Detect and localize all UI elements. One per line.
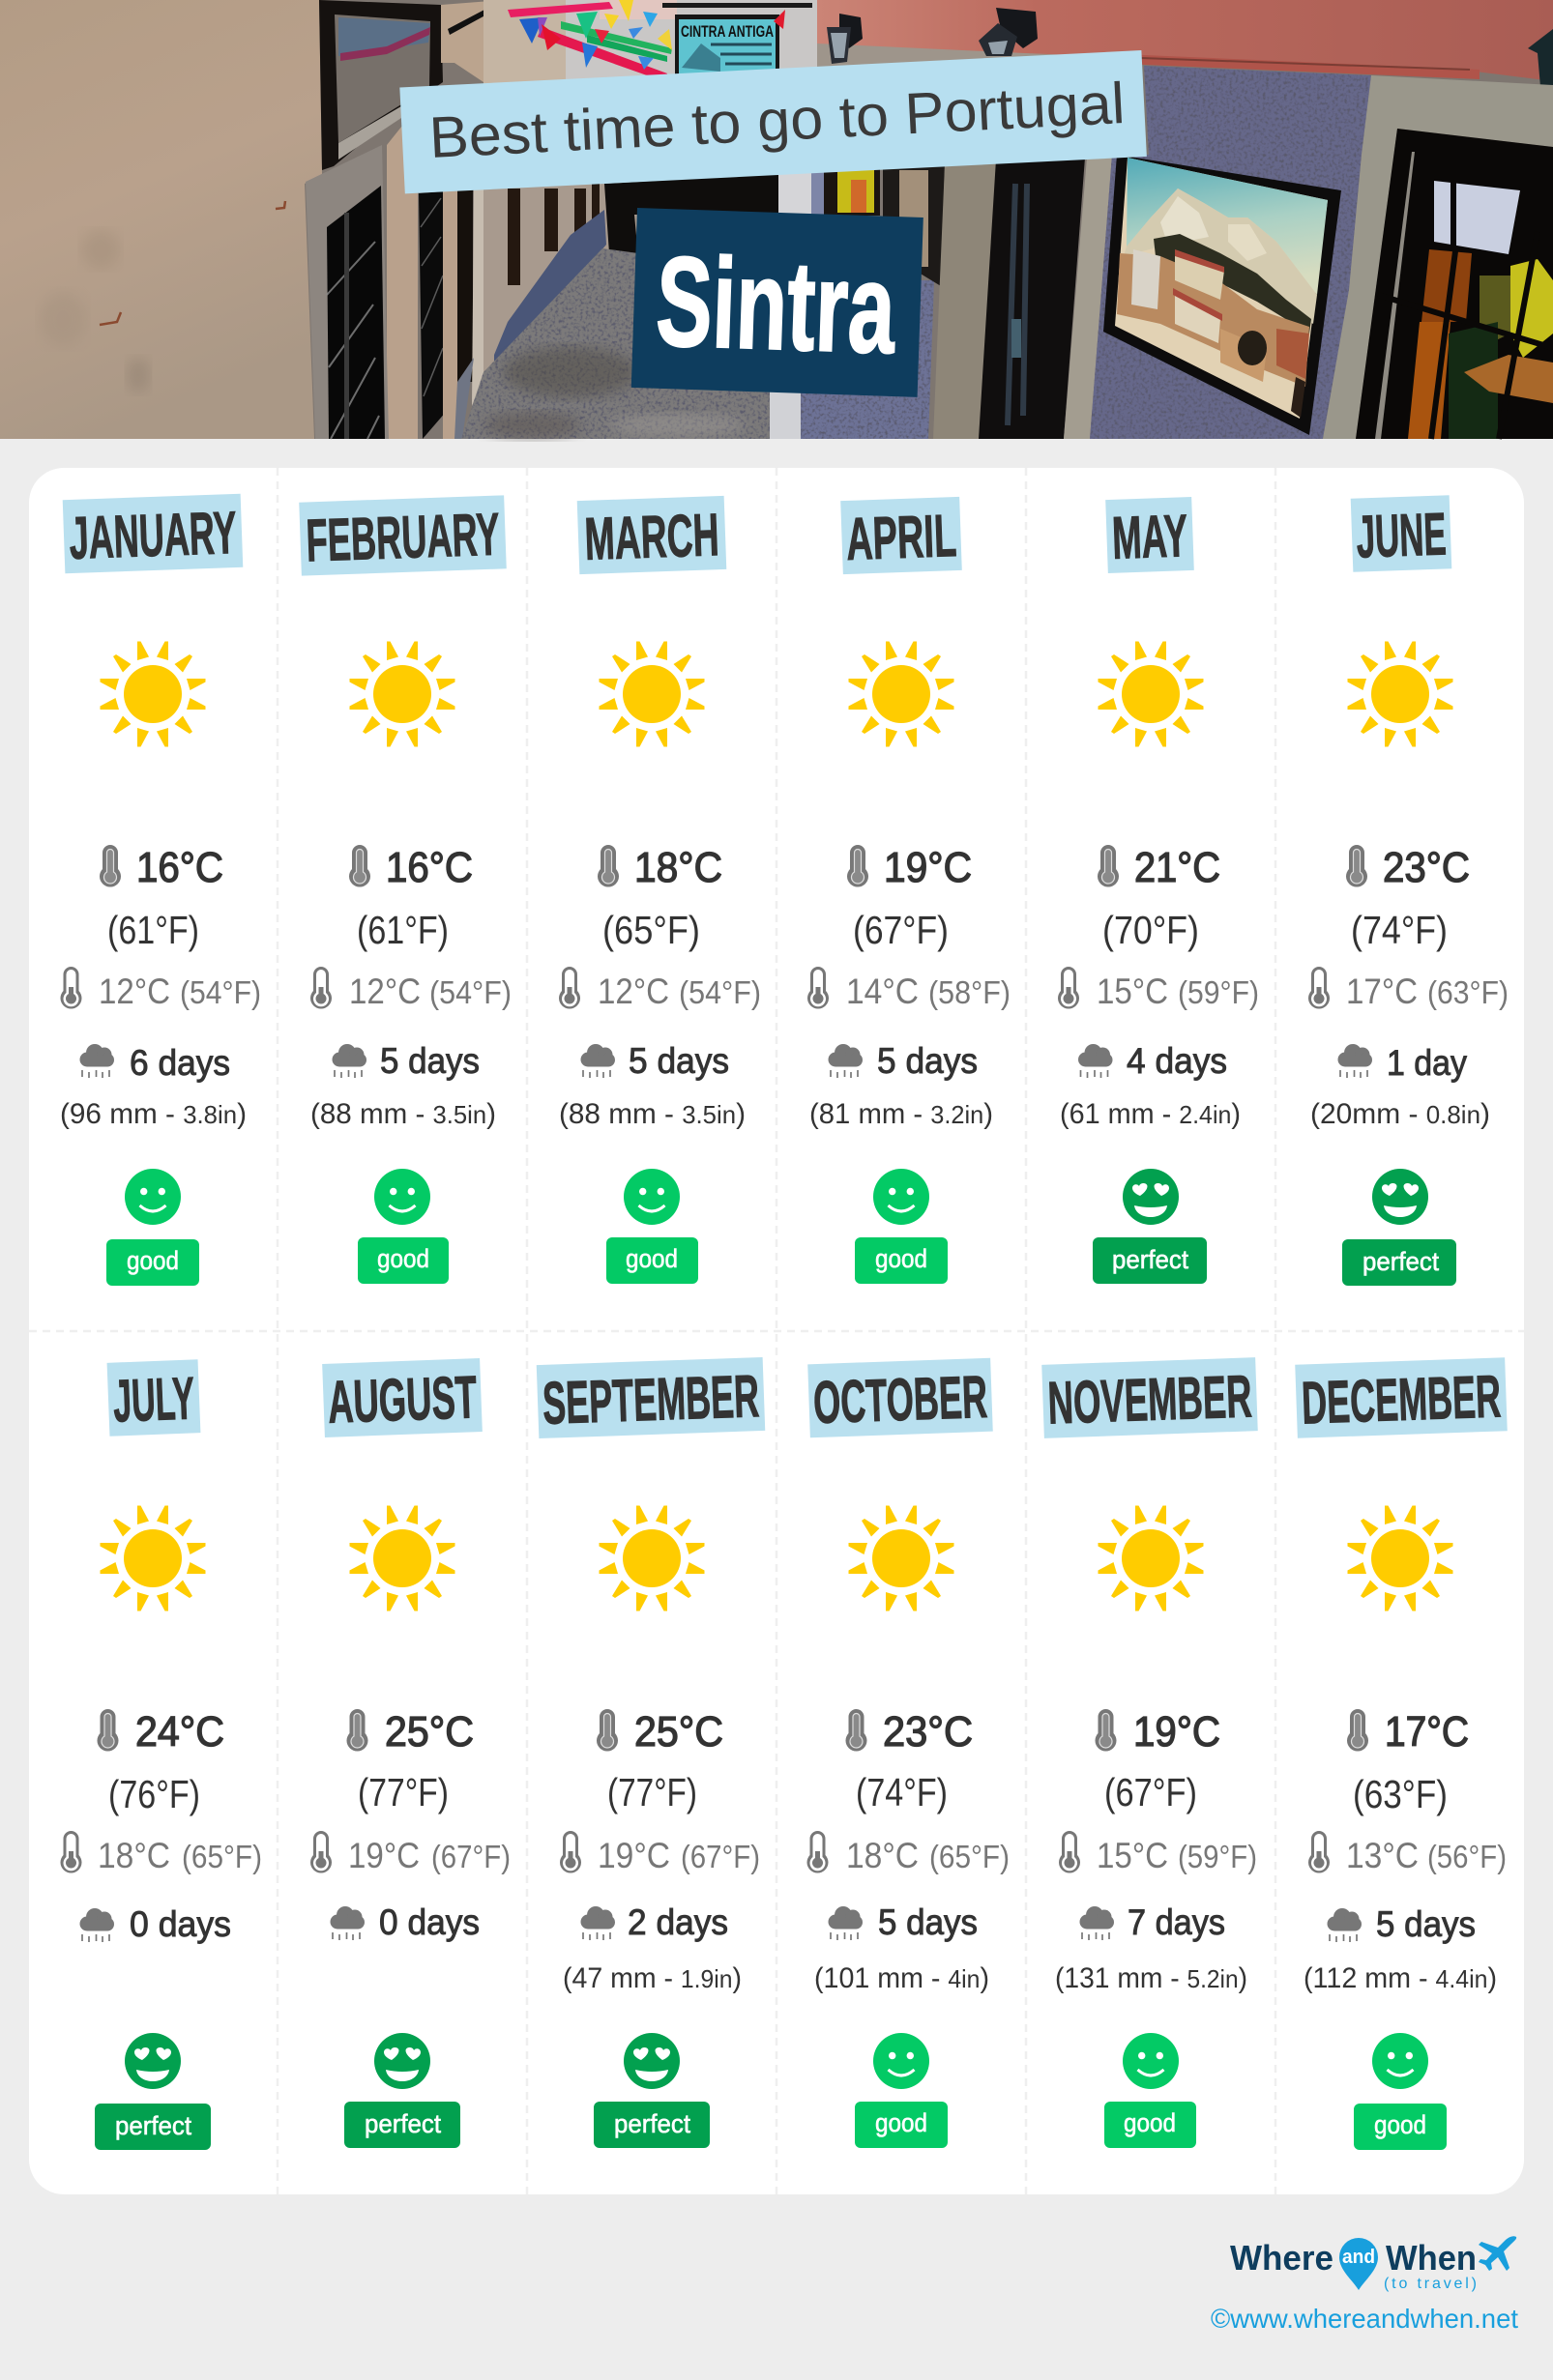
high temperature fahrenheit: (63°F) xyxy=(1353,1772,1448,1816)
icon: sun xyxy=(350,642,454,746)
rainfall: (88 mm - 3.5in) xyxy=(559,1098,746,1130)
low temperature fahrenheit: (59°F) xyxy=(1178,1839,1257,1874)
icon: rain cloud xyxy=(79,1908,114,1942)
rainfall: (61 mm - 2.4in) xyxy=(1060,1098,1241,1130)
rating badge xyxy=(1354,2104,1447,2150)
low temperature fahrenheit: (58°F) xyxy=(928,974,1011,1010)
month label: SEPTEMBER xyxy=(542,1363,760,1437)
low temperature: 12°C xyxy=(598,972,669,1011)
icon: sun xyxy=(1099,1506,1203,1611)
rainy days: 4 days xyxy=(1127,1041,1227,1081)
rating badge: good xyxy=(1124,2108,1176,2137)
icon: plane xyxy=(1479,2236,1516,2271)
icon: rain cloud xyxy=(580,1906,615,1940)
rainy days: 7 days xyxy=(1128,1902,1225,1942)
month label: OCTOBER xyxy=(812,1364,988,1437)
icon: sun xyxy=(849,642,953,746)
month label xyxy=(1105,497,1194,573)
icon: low temperature xyxy=(1308,967,1330,1009)
panel: March xyxy=(559,496,761,1284)
month label xyxy=(807,1358,993,1437)
high temperature: 21°C xyxy=(1134,844,1220,891)
rating badge: good xyxy=(377,1244,429,1273)
high temperature: 25°C xyxy=(634,1708,723,1756)
low temperature fahrenheit: (54°F) xyxy=(180,974,261,1010)
high temperature fahrenheit: (67°F) xyxy=(1104,1770,1197,1814)
icon: rain cloud xyxy=(331,1906,365,1940)
month label: JULY xyxy=(112,1365,195,1436)
low temperature fahrenheit: (65°F) xyxy=(929,1839,1010,1874)
rainfall: (20mm - 0.8in) xyxy=(1310,1098,1490,1130)
icon: good face xyxy=(873,1169,929,1225)
panel: June xyxy=(1308,495,1509,1286)
rainy days: 5 days xyxy=(877,1041,978,1081)
rating badge: good xyxy=(875,2108,927,2137)
panel: September xyxy=(537,1357,765,2148)
icon: sun xyxy=(350,1506,454,1611)
icon: high temperature xyxy=(1098,845,1119,887)
icon: perfect face xyxy=(1123,1169,1179,1225)
icon: sun xyxy=(1348,642,1452,746)
icon: low temperature xyxy=(310,1831,332,1873)
rating badge: perfect xyxy=(1363,1247,1439,1276)
panel: May xyxy=(1058,497,1259,1284)
icon: rain cloud xyxy=(828,1044,863,1078)
rainy days: 2 days xyxy=(628,1902,728,1942)
rating badge xyxy=(358,1237,449,1284)
high temperature: 25°C xyxy=(385,1708,474,1756)
rating badge xyxy=(1093,1237,1207,1284)
icon: perfect face xyxy=(374,2033,430,2089)
icon: rain cloud xyxy=(1079,1906,1114,1940)
icon: map pin xyxy=(1339,2238,1378,2290)
rating badge: good xyxy=(875,1244,927,1273)
rainy days: 1 day xyxy=(1387,1043,1467,1083)
rating badge xyxy=(1104,2102,1196,2148)
logo: Where and When: and xyxy=(1342,2247,1375,2268)
month label xyxy=(577,496,726,574)
panel: October xyxy=(806,1358,1010,2148)
high temperature: 23°C xyxy=(883,1708,973,1756)
high temperature: 19°C xyxy=(884,844,972,891)
rating badge xyxy=(855,1237,948,1284)
title banner xyxy=(399,50,1147,193)
title banner: Best time to go to Portugal xyxy=(427,71,1127,170)
logo: Where and When: Where xyxy=(1230,2238,1333,2278)
rainy days: 0 days xyxy=(379,1902,480,1942)
month label: MARCH xyxy=(583,502,720,573)
icon: high temperature xyxy=(847,845,868,887)
icon: good face xyxy=(1123,2033,1179,2089)
icon: high temperature xyxy=(100,845,121,887)
icon: rain cloud xyxy=(79,1044,114,1078)
month label: MAY xyxy=(1111,503,1188,572)
low temperature: 15°C xyxy=(1097,1836,1168,1875)
month label: AUGUST xyxy=(327,1364,478,1437)
icon: low temperature xyxy=(1058,967,1079,1009)
low temperature: 19°C xyxy=(598,1836,670,1875)
website credit: ©www.whereandwhen.net xyxy=(1211,2304,1518,2334)
icon: high temperature xyxy=(346,1709,367,1752)
month label xyxy=(1351,495,1451,572)
logo: Where and When xyxy=(1230,2236,1516,2292)
rainfall: (96 mm - 3.8in) xyxy=(60,1098,247,1130)
lanterns xyxy=(839,14,863,48)
icon: high temperature xyxy=(598,845,619,887)
rating badge: good xyxy=(127,1246,179,1275)
low temperature: 13°C xyxy=(1346,1836,1419,1875)
rating badge xyxy=(855,2102,948,2148)
high temperature: 16°C xyxy=(386,844,473,891)
high temperature fahrenheit: (74°F) xyxy=(856,1770,948,1814)
high temperature: 24°C xyxy=(135,1708,224,1756)
azulejo painting xyxy=(1103,155,1341,435)
icon: rain cloud xyxy=(828,1906,863,1940)
high temperature: 17°C xyxy=(1385,1708,1469,1756)
panel: December xyxy=(1295,1357,1508,2150)
high temperature fahrenheit: (61°F) xyxy=(357,908,449,952)
month label: JANUARY xyxy=(68,500,238,572)
rainfall: (88 mm - 3.5in) xyxy=(310,1098,496,1130)
rainfall: (131 mm - 5.2in) xyxy=(1055,1962,1247,1994)
top centre walls, bunting, sign xyxy=(483,0,566,87)
low temperature: 19°C xyxy=(348,1836,420,1875)
high temperature fahrenheit: (67°F) xyxy=(853,908,949,952)
icon: sun xyxy=(600,642,704,746)
rainy days: 5 days xyxy=(629,1041,729,1081)
month label xyxy=(299,495,507,576)
icon: low temperature xyxy=(559,967,580,1009)
icon: rain cloud xyxy=(1327,1908,1362,1942)
low temperature: 14°C xyxy=(846,972,919,1011)
high temperature fahrenheit: (74°F) xyxy=(1351,908,1448,952)
panel: April xyxy=(807,497,1011,1284)
icon: rain cloud xyxy=(1338,1044,1372,1078)
high temperature: 16°C xyxy=(136,844,223,891)
panel: July xyxy=(60,1359,262,2150)
high temperature fahrenheit: (65°F) xyxy=(602,908,700,952)
rating badge: perfect xyxy=(365,2109,441,2138)
icon: low temperature xyxy=(60,1831,81,1873)
icon: good face xyxy=(125,1169,181,1225)
rating badge xyxy=(106,1239,199,1286)
high temperature: 18°C xyxy=(634,844,722,891)
rating badge xyxy=(594,2102,710,2148)
rating badge: good xyxy=(626,1244,678,1273)
icon: sun xyxy=(101,1506,205,1611)
icon: low temperature xyxy=(807,967,829,1009)
icon: low temperature xyxy=(60,967,81,1009)
header photo: Sintra street xyxy=(0,0,1553,439)
icon: high temperature xyxy=(597,1709,618,1752)
rainy days: 0 days xyxy=(130,1904,231,1944)
icon: low temperature xyxy=(806,1831,828,1873)
icon: good face xyxy=(873,2033,929,2089)
month label xyxy=(840,497,962,574)
panel: August xyxy=(310,1358,511,2148)
low temperature fahrenheit: (67°F) xyxy=(431,1839,511,1874)
icon: sun xyxy=(1099,642,1203,746)
month label: APRIL xyxy=(845,503,957,573)
panel: January xyxy=(60,494,261,1286)
icon: low temperature xyxy=(1059,1831,1080,1873)
icon: rain cloud xyxy=(580,1044,615,1078)
rating badge: perfect xyxy=(1112,1245,1188,1274)
logo: Where and When: (to travel) xyxy=(1384,2276,1477,2292)
icon: sun xyxy=(849,1506,953,1611)
grey column xyxy=(1323,75,1553,439)
icon: high temperature xyxy=(349,845,370,887)
icon: high temperature xyxy=(845,1709,866,1752)
high temperature fahrenheit: (70°F) xyxy=(1102,908,1199,952)
low temperature fahrenheit: (67°F) xyxy=(681,1839,760,1874)
rainy days: 5 days xyxy=(1376,1904,1476,1944)
month label xyxy=(322,1358,483,1437)
high temperature fahrenheit: (77°F) xyxy=(358,1770,449,1814)
low temperature: 18°C xyxy=(98,1836,170,1875)
rainy days: 5 days xyxy=(380,1041,480,1081)
low temperature: 18°C xyxy=(846,1836,919,1875)
logo: Where and When: When xyxy=(1386,2238,1477,2278)
city title xyxy=(631,208,923,397)
icon: good face xyxy=(624,1169,680,1225)
month label xyxy=(1041,1357,1258,1438)
rainy days: 6 days xyxy=(130,1043,230,1083)
high temperature fahrenheit: (77°F) xyxy=(607,1770,697,1814)
low temperature: 12°C xyxy=(99,972,170,1011)
high temperature fahrenheit: (61°F) xyxy=(107,908,199,952)
icon: perfect face xyxy=(125,2033,181,2089)
icon: good face xyxy=(1372,2033,1428,2089)
rating badge: perfect xyxy=(115,2111,191,2140)
rainy days: 5 days xyxy=(878,1902,978,1942)
icon: rain cloud xyxy=(1078,1044,1112,1078)
high temperature: 23°C xyxy=(1383,844,1470,891)
panel: November xyxy=(1041,1357,1258,2148)
rating badge: good xyxy=(1374,2110,1426,2139)
panel: February xyxy=(299,495,512,1284)
icon: rain cloud xyxy=(333,1044,366,1078)
low temperature fahrenheit: (54°F) xyxy=(679,974,761,1010)
low temperature fahrenheit: (59°F) xyxy=(1178,974,1259,1010)
month label xyxy=(107,1359,200,1437)
icon: high temperature xyxy=(97,1709,118,1752)
icon: sun xyxy=(101,642,205,746)
icon: perfect face xyxy=(624,2033,680,2089)
icon: perfect face xyxy=(1372,1169,1428,1225)
month label: NOVEMBER xyxy=(1046,1363,1253,1437)
rainfall: (47 mm - 1.9in) xyxy=(563,1962,742,1994)
month label: FEBRUARY xyxy=(305,502,501,574)
month label xyxy=(63,494,243,573)
icon: low temperature xyxy=(310,967,332,1009)
month label xyxy=(537,1357,765,1438)
low temperature: 12°C xyxy=(349,972,421,1011)
low temperature: 15°C xyxy=(1097,972,1168,1011)
icon: high temperature xyxy=(1346,845,1367,887)
rainfall: (81 mm - 3.2in) xyxy=(809,1098,993,1130)
icon: sun xyxy=(1348,1506,1452,1611)
icon: high temperature xyxy=(1347,1709,1368,1752)
rating badge: perfect xyxy=(614,2109,690,2138)
icon: sun xyxy=(600,1506,704,1611)
high temperature fahrenheit: (76°F) xyxy=(108,1772,200,1816)
low temperature fahrenheit: (56°F) xyxy=(1427,1839,1507,1874)
panel: monthly calendar card xyxy=(29,468,1524,2194)
low temperature fahrenheit: (65°F) xyxy=(182,1839,262,1874)
icon: high temperature xyxy=(1095,1709,1116,1752)
salmon wall xyxy=(817,0,1553,81)
blue wall xyxy=(1090,66,1371,439)
rating badge xyxy=(95,2104,211,2150)
rainfall: (101 mm - 4in) xyxy=(814,1962,989,1994)
rainfall: (112 mm - 4.4in) xyxy=(1304,1962,1497,1994)
rating badge xyxy=(344,2102,460,2148)
rating badge xyxy=(606,1237,698,1284)
icon: low temperature xyxy=(560,1831,581,1873)
lit shop window xyxy=(1356,129,1553,439)
low temperature: 17°C xyxy=(1346,972,1418,1011)
city title: Sintra xyxy=(654,230,898,380)
alley floor and walls xyxy=(483,179,638,387)
high temperature: 19°C xyxy=(1133,1708,1220,1756)
low temperature fahrenheit: (63°F) xyxy=(1427,974,1509,1010)
icon: good face xyxy=(374,1169,430,1225)
month label: JUNE xyxy=(1355,501,1448,571)
low temperature fahrenheit: (54°F) xyxy=(429,974,512,1010)
icon: low temperature xyxy=(1308,1831,1330,1873)
rating badge xyxy=(1342,1239,1456,1286)
header photo: Sintra street: CINTRA ANTIGA xyxy=(681,22,774,41)
